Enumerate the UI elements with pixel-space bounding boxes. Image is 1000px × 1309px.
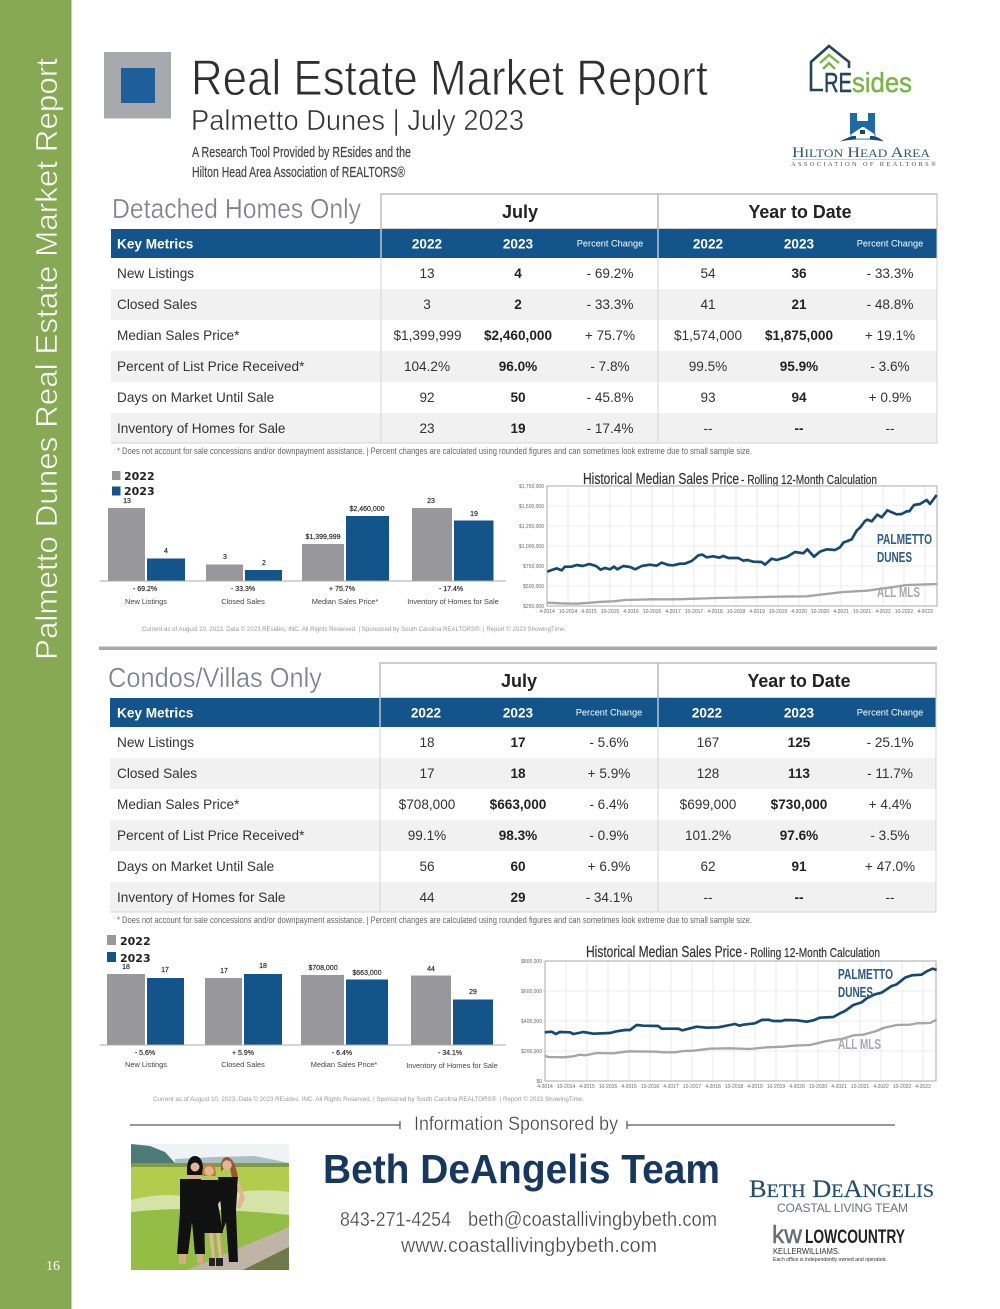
table: detached homes: 2023 xyxy=(784,236,815,252)
row: Median Sales Price: $663,000 xyxy=(490,797,546,812)
row: New Listings: - 33.3% xyxy=(867,266,913,281)
x axis labels: 10-2018 xyxy=(725,1084,743,1090)
row: Percent of List Price Received: 98.3% xyxy=(499,828,537,843)
bar chart: condos and villas: - 34.1% xyxy=(438,1050,462,1057)
row: Closed Sales: + 5.9% xyxy=(588,766,630,781)
row: Days on Market Until Sale: 62 xyxy=(700,859,716,874)
sidebar xyxy=(0,0,72,1309)
table: detached homes: July xyxy=(502,202,538,222)
x axis labels: 4-2022 xyxy=(875,609,891,615)
series labels: DUNES xyxy=(877,550,912,566)
table: detached homes: Percent Change xyxy=(577,238,643,248)
row: Days on Market Until Sale: Days on Market Until Sale xyxy=(117,859,274,874)
logo: KW Lowcountry Keller Williams xyxy=(772,1221,905,1263)
row: Percent of List Price Received: 101.2% xyxy=(685,828,731,843)
table: condos and villas: 2022 xyxy=(692,706,723,720)
bar chart: detached homes: Median Sales Price* xyxy=(312,597,378,606)
row: Inventory of Homes for Sale: -- xyxy=(794,890,804,905)
row: Closed Sales: 2 xyxy=(514,297,522,312)
y axis labels: $750,000 xyxy=(523,564,544,570)
legend: detached xyxy=(112,470,155,498)
row: Percent of List Price Received: 96.0% xyxy=(499,359,537,374)
bar chart: condos and villas: New Listings xyxy=(125,1060,167,1069)
series labels xyxy=(877,532,932,601)
row: Days on Market Until Sale: + 0.9% xyxy=(869,390,911,405)
x axis labels: 4-2016 xyxy=(623,609,639,615)
row: Closed Sales xyxy=(117,297,913,312)
row: New Listings: 167 xyxy=(697,735,719,750)
row: Percent of List Price Received: - 3.6% xyxy=(870,359,910,374)
row: Closed Sales: Closed Sales xyxy=(117,766,197,781)
row: Closed Sales: 17 xyxy=(419,766,435,781)
row: Median Sales Price: Median Sales Price* xyxy=(117,797,240,812)
x axis labels: 4-2021 xyxy=(833,609,849,615)
row: New Listings xyxy=(117,266,913,281)
line chart: condos historical median sales price xyxy=(521,944,937,1090)
legend: condos xyxy=(107,935,151,965)
logo: Beth DeAngelis Coastal Living Team: BETH DEANGELIS xyxy=(749,1176,934,1203)
row: New Listings: - 5.6% xyxy=(589,735,629,750)
row: New Listings: 13 xyxy=(419,266,435,281)
y axis labels: $250,000 xyxy=(523,604,544,610)
bar chart: condos and villas: + 5.9% xyxy=(232,1050,254,1057)
x axis labels: 4-2017 xyxy=(663,1084,679,1090)
bar chart: detached homes: 13 xyxy=(123,498,131,505)
x axis labels: 10-2014 xyxy=(559,609,577,615)
bar chart: detached homes: Inventory of Homes for Sale xyxy=(407,597,499,606)
title: Real Estate Market Report xyxy=(191,50,708,106)
row: Percent of List Price Received: Percent of List Price Received* xyxy=(117,828,305,843)
x axis labels: 10-2019 xyxy=(767,1084,785,1090)
bar chart: detached homes: - 69.2% xyxy=(133,586,157,593)
row: Closed Sales: - 48.8% xyxy=(867,297,913,312)
x axis labels: 10-2021 xyxy=(853,609,871,615)
table: condos and villas: Percent Change xyxy=(576,708,642,718)
x axis labels: 10-2018 xyxy=(727,609,745,615)
figure: left woman xyxy=(177,1156,205,1264)
y axis labels: $200,000 xyxy=(521,1049,542,1055)
series labels: DUNES xyxy=(838,985,873,1001)
table: condos and villas: July xyxy=(501,671,537,691)
row: Percent of List Price Received: Percent of List Price Received* xyxy=(117,359,305,374)
row: Inventory of Homes for Sale: 19 xyxy=(510,421,526,436)
footnote: * Does not account for sale concessions and/or downpayment assistance. | Percent changes are calculated using rounded figures and can sometimes look extreme due to small sample size. xyxy=(117,915,752,925)
bar chart: detached homes: $1,399,999 xyxy=(305,534,341,541)
x axis labels: 4-2020 xyxy=(791,609,807,615)
logo: REsides: sides xyxy=(852,67,912,98)
x axis labels: 4-2018 xyxy=(707,609,723,615)
row: Percent of List Price Received xyxy=(117,828,910,843)
row: Median Sales Price: + 75.7% xyxy=(585,328,635,343)
table: condos and villas xyxy=(110,663,936,912)
y axis labels: $1,000,000 xyxy=(519,544,544,550)
row: Inventory of Homes for Sale: 29 xyxy=(510,890,526,905)
footnote: * Does not account for sale concessions and/or downpayment assistance. | Percent changes are calculated using rounded figures and can sometimes look extreme due to small sample size. xyxy=(117,446,752,456)
row: New Listings: - 69.2% xyxy=(587,266,633,281)
x axis labels: 10-2019 xyxy=(769,609,787,615)
row: Percent of List Price Received: 99.1% xyxy=(408,828,446,843)
table: condos and villas: Percent Change xyxy=(857,708,923,718)
icon: report square xyxy=(104,52,171,118)
x axis labels: 4-2020 xyxy=(789,1084,805,1090)
logo: KW Lowcountry Keller Williams: LOWCOUNTRY xyxy=(805,1227,905,1248)
table: condos and villas: 2023 xyxy=(503,706,534,720)
bar chart: condos and villas: $663,000 xyxy=(352,970,382,977)
row: Closed Sales: 41 xyxy=(700,297,716,312)
row: Median Sales Price: - 6.4% xyxy=(589,797,629,812)
bar chart: condos and villas: Inventory of Homes for Sale xyxy=(406,1061,498,1070)
page number: 16 xyxy=(46,1259,60,1274)
x axis labels: 10-2017 xyxy=(685,609,703,615)
figure: middle woman xyxy=(187,1163,223,1266)
chart title: Historical Median Sales Price xyxy=(583,471,739,488)
table: detached homes: Percent Change xyxy=(857,238,923,248)
x axis labels: 4-2017 xyxy=(665,609,681,615)
row: Days on Market Until Sale xyxy=(117,390,911,405)
contact details: www.coastallivingbybeth.com xyxy=(400,1235,657,1257)
row: Percent of List Price Received xyxy=(117,359,910,374)
table: detached homes xyxy=(111,194,937,443)
logo: KW Lowcountry Keller Williams: kw xyxy=(772,1221,803,1249)
row: Closed Sales: 18 xyxy=(510,766,526,781)
row: New Listings: 54 xyxy=(700,266,716,281)
row: Days on Market Until Sale: + 6.9% xyxy=(588,859,630,874)
row: Closed Sales xyxy=(117,766,913,781)
logo: REsides xyxy=(811,46,912,98)
y axis labels: $400,000 xyxy=(521,1019,542,1025)
row: New Listings: New Listings xyxy=(117,266,194,281)
logo: KW Lowcountry Keller Williams: Each office is independently owned and operated. xyxy=(773,1257,887,1263)
row: Percent of List Price Received: 99.5% xyxy=(689,359,727,374)
x axis labels: 4-2014 xyxy=(537,1084,553,1090)
row: New Listings: New Listings xyxy=(117,735,194,750)
legend: condos: 2023 xyxy=(120,952,151,965)
sponsor name: Beth DeAngelis Team xyxy=(323,1146,720,1192)
row: Percent of List Price Received: 97.6% xyxy=(780,828,818,843)
logo: REsides: RE xyxy=(824,67,852,98)
row: Median Sales Price xyxy=(117,328,915,343)
x axis labels: 10-2016 xyxy=(641,1084,659,1090)
x axis labels: 10-2022 xyxy=(895,609,913,615)
series labels: ALL MLS xyxy=(838,1037,881,1053)
x axis labels: 4-2016 xyxy=(621,1084,637,1090)
row: Closed Sales: 113 xyxy=(788,766,810,781)
logo: Beth DeAngelis Coastal Living Team xyxy=(749,1176,934,1215)
row: Median Sales Price xyxy=(117,797,911,812)
legend: detached: 2023 xyxy=(124,485,155,498)
bar chart: detached homes: 3 xyxy=(223,554,227,561)
bar chart: condos and villas: Closed Sales xyxy=(221,1060,265,1069)
row: Inventory of Homes for Sale: -- xyxy=(794,421,804,436)
bar chart: condos and villas: 18 xyxy=(122,964,130,971)
data credit: Current as of August 10, 2023. Data © 2023 REsides, INC. All Rights Reserved. | Sponsored by South Carolina REALTORS®. | Report © 2023 ShowingTime. xyxy=(142,625,566,633)
row: Inventory of Homes for Sale xyxy=(117,890,895,905)
figure: right woman xyxy=(218,1157,245,1262)
bar chart: detached homes: 19 xyxy=(470,511,478,518)
x axis labels: 4-2019 xyxy=(747,1084,763,1090)
chart title: - Rolling 12-Month Calculation xyxy=(741,472,877,487)
sponsor heading xyxy=(130,1114,895,1135)
row: Median Sales Price: $1,875,000 xyxy=(765,328,833,343)
intro text: Hilton Head Area Association of REALTORS® xyxy=(192,164,405,181)
row: Days on Market Until Sale: - 45.8% xyxy=(587,390,633,405)
sidebar title: Palmetto Dunes Real Estate Market Report xyxy=(29,58,64,660)
subtitle: Palmetto Dunes | July 2023 xyxy=(191,105,524,137)
x axis labels xyxy=(539,609,933,615)
row: Closed Sales: Closed Sales xyxy=(117,297,197,312)
bar chart: detached homes: - 33.3% xyxy=(231,586,255,593)
y axis labels: $1,500,000 xyxy=(519,504,544,510)
bar chart: condos and villas: - 6.4% xyxy=(332,1050,352,1057)
x axis labels: 4-2023 xyxy=(917,609,933,615)
row: Days on Market Until Sale: 93 xyxy=(700,390,716,405)
row: Median Sales Price: + 4.4% xyxy=(869,797,911,812)
row: Days on Market Until Sale: 91 xyxy=(791,859,807,874)
series labels: ALL MLS xyxy=(877,585,920,601)
section heading: Detached Homes Only: Detached Homes Only xyxy=(112,193,361,224)
row: Inventory of Homes for Sale: Inventory of Homes for Sale xyxy=(117,890,286,905)
row: Inventory of Homes for Sale: - 17.4% xyxy=(587,421,633,436)
x axis labels: 10-2015 xyxy=(601,609,619,615)
row: Days on Market Until Sale: 92 xyxy=(419,390,435,405)
bar chart: condos and villas: 17 xyxy=(161,967,169,974)
y axis labels: $0 xyxy=(536,1079,542,1085)
row: Median Sales Price: $730,000 xyxy=(771,797,827,812)
bar chart: detached homes: - 17.4% xyxy=(439,586,463,593)
row: New Listings: 18 xyxy=(419,735,435,750)
row: Percent of List Price Received: 95.9% xyxy=(780,359,818,374)
row: Days on Market Until Sale: 50 xyxy=(510,390,526,405)
legend: detached: 2022 xyxy=(124,470,155,483)
x axis labels: 10-2017 xyxy=(683,1084,701,1090)
contact details: beth@coastallivingbybeth.com xyxy=(468,1209,717,1231)
table: detached homes: Year to Date xyxy=(748,202,852,222)
row: Closed Sales: - 11.7% xyxy=(867,766,913,781)
row: Median Sales Price: $2,460,000 xyxy=(484,328,552,343)
table: detached homes: 2022 xyxy=(412,236,443,252)
row: Inventory of Homes for Sale: 44 xyxy=(419,890,435,905)
x axis labels: 4-2019 xyxy=(749,609,765,615)
sponsor heading: Information Sponsored by xyxy=(414,1114,618,1135)
y axis labels: $800,000 xyxy=(521,959,542,965)
row: Inventory of Homes for Sale: -- xyxy=(703,421,713,436)
bar chart: condos and villas: Median Sales Price* xyxy=(311,1060,377,1069)
logo: Hilton Head Area Association of Realtors: ASSOCIATION OF REALTORS® xyxy=(791,161,936,168)
row: Percent of List Price Received: - 0.9% xyxy=(589,828,629,843)
row: Inventory of Homes for Sale: 23 xyxy=(419,421,435,436)
y axis labels: $500,000 xyxy=(523,584,544,590)
row: New Listings: 36 xyxy=(791,266,807,281)
y axis labels: $1,750,000 xyxy=(519,484,544,490)
y axis labels xyxy=(521,959,542,1085)
y axis labels: $1,250,000 xyxy=(519,524,544,530)
legend: condos: 2022 xyxy=(120,935,151,948)
line chart: detached historical median sales price xyxy=(519,471,937,615)
row: New Listings: 4 xyxy=(514,266,522,281)
bar chart: condos and villas: - 5.6% xyxy=(135,1050,155,1057)
row: Percent of List Price Received: 104.2% xyxy=(404,359,450,374)
row: Median Sales Price: $1,399,999 xyxy=(393,328,462,343)
bar chart: condos and villas: 29 xyxy=(469,989,477,996)
row: Inventory of Homes for Sale: -- xyxy=(703,890,713,905)
bar chart: detached homes: 23 xyxy=(427,498,435,505)
x axis labels: 10-2021 xyxy=(851,1084,869,1090)
x axis labels: 4-2015 xyxy=(581,609,597,615)
table: condos and villas: Year to Date xyxy=(748,671,850,691)
row: Days on Market Until Sale: 60 xyxy=(510,859,526,874)
bar chart: detached homes: 4 xyxy=(164,548,168,555)
bar chart: detached homes: New Listings xyxy=(125,597,167,606)
row: Median Sales Price: $1,574,000 xyxy=(674,328,742,343)
x axis labels: 10-2014 xyxy=(557,1084,575,1090)
row: Closed Sales: 21 xyxy=(791,297,807,312)
row: Median Sales Price: $708,000 xyxy=(399,797,456,812)
x axis labels xyxy=(537,1084,931,1090)
row: New Listings: - 25.1% xyxy=(867,735,913,750)
table: condos and villas: 2022 xyxy=(411,706,442,720)
contact details: 843-271-4254 xyxy=(340,1209,451,1231)
bar chart: condos and villas: 44 xyxy=(427,966,435,973)
row: Days on Market Until Sale: + 47.0% xyxy=(865,859,915,874)
contact details xyxy=(340,1209,717,1257)
logo: Hilton Head Area Association of Realtors xyxy=(791,113,936,168)
logo: Hilton Head Area Association of Realtors: HILTON HEAD AREA xyxy=(792,145,931,161)
chart title: Historical Median Sales Price xyxy=(586,944,742,961)
y axis labels xyxy=(519,484,544,610)
row: Days on Market Until Sale: 56 xyxy=(419,859,435,874)
x axis labels: 10-2015 xyxy=(599,1084,617,1090)
table: detached homes: 2023 xyxy=(503,236,534,252)
bar chart: condos and villas: 17 xyxy=(220,968,228,975)
bar chart: condos and villas xyxy=(100,963,506,1070)
x axis labels: 4-2022 xyxy=(873,1084,889,1090)
series labels xyxy=(838,967,893,1053)
row: Inventory of Homes for Sale: -- xyxy=(885,890,895,905)
row: Closed Sales: 128 xyxy=(697,766,719,781)
logo: KW Lowcountry Keller Williams: KELLERWILLIAMS. xyxy=(773,1247,840,1256)
row: New Listings xyxy=(117,735,913,750)
row: Inventory of Homes for Sale: Inventory of Homes for Sale xyxy=(117,421,286,436)
bar chart: detached homes: Closed Sales xyxy=(221,597,265,606)
row: Percent of List Price Received: - 3.5% xyxy=(870,828,910,843)
intro text: A Research Tool Provided by REsides and the xyxy=(192,144,411,161)
bar chart: detached homes: $2,460,000 xyxy=(349,506,385,513)
x axis labels: 10-2020 xyxy=(811,609,829,615)
row: Inventory of Homes for Sale: - 34.1% xyxy=(586,890,632,905)
section heading: Condos/Villas Only: Condos/Villas Only xyxy=(108,662,322,693)
table: condos and villas: Key Metrics xyxy=(117,706,193,720)
series labels: PALMETTO xyxy=(838,967,893,983)
row: Inventory of Homes for Sale xyxy=(117,421,895,436)
bar chart: detached homes: + 75.7% xyxy=(329,586,355,593)
row: New Listings: 125 xyxy=(788,735,811,750)
intro text xyxy=(192,144,411,181)
chart title: - Rolling 12-Month Calculation xyxy=(744,945,880,960)
photo: team on marsh boardwalk xyxy=(131,1144,289,1270)
row: Closed Sales: 3 xyxy=(423,297,431,312)
x axis labels: 4-2018 xyxy=(705,1084,721,1090)
row: Days on Market Until Sale xyxy=(117,859,915,874)
table: detached homes: Key Metrics xyxy=(117,236,193,252)
row: Inventory of Homes for Sale: -- xyxy=(885,421,895,436)
x axis labels: 4-2023 xyxy=(915,1084,931,1090)
row: Closed Sales: - 33.3% xyxy=(587,297,633,312)
table: condos and villas: 2023 xyxy=(784,706,815,720)
bar chart: condos and villas: 18 xyxy=(259,963,267,970)
x axis labels: 4-2014 xyxy=(539,609,555,615)
row: New Listings: 17 xyxy=(510,735,526,750)
row: Median Sales Price: Median Sales Price* xyxy=(117,328,240,343)
row: Days on Market Until Sale: 94 xyxy=(791,390,807,405)
row: Median Sales Price: $699,000 xyxy=(680,797,737,812)
bar chart: detached homes: 2 xyxy=(262,560,266,567)
row: Percent of List Price Received: - 7.8% xyxy=(590,359,630,374)
row: Days on Market Until Sale: Days on Market Until Sale xyxy=(117,390,274,405)
bar chart: condos and villas: $708,000 xyxy=(308,965,338,972)
x axis labels: 4-2021 xyxy=(831,1084,847,1090)
row: Median Sales Price: + 19.1% xyxy=(865,328,915,343)
x axis labels: 4-2015 xyxy=(579,1084,595,1090)
y axis labels: $600,000 xyxy=(521,989,542,995)
x axis labels: 10-2016 xyxy=(643,609,661,615)
series labels: PALMETTO xyxy=(877,532,932,548)
data credit: Current as of August 10, 2023. Data © 2023 REsides, INC. All Rights Reserved. | Sponsored by South Carolina REALTORS®. | Report © 2023 ShowingTime. xyxy=(153,1095,584,1103)
logo: Beth DeAngelis Coastal Living Team: COASTAL LIVING TEAM xyxy=(777,1201,908,1215)
x axis labels: 10-2020 xyxy=(809,1084,827,1090)
table: detached homes: 2022 xyxy=(693,236,724,252)
bar chart: detached homes xyxy=(100,498,506,606)
x axis labels: 10-2022 xyxy=(893,1084,911,1090)
